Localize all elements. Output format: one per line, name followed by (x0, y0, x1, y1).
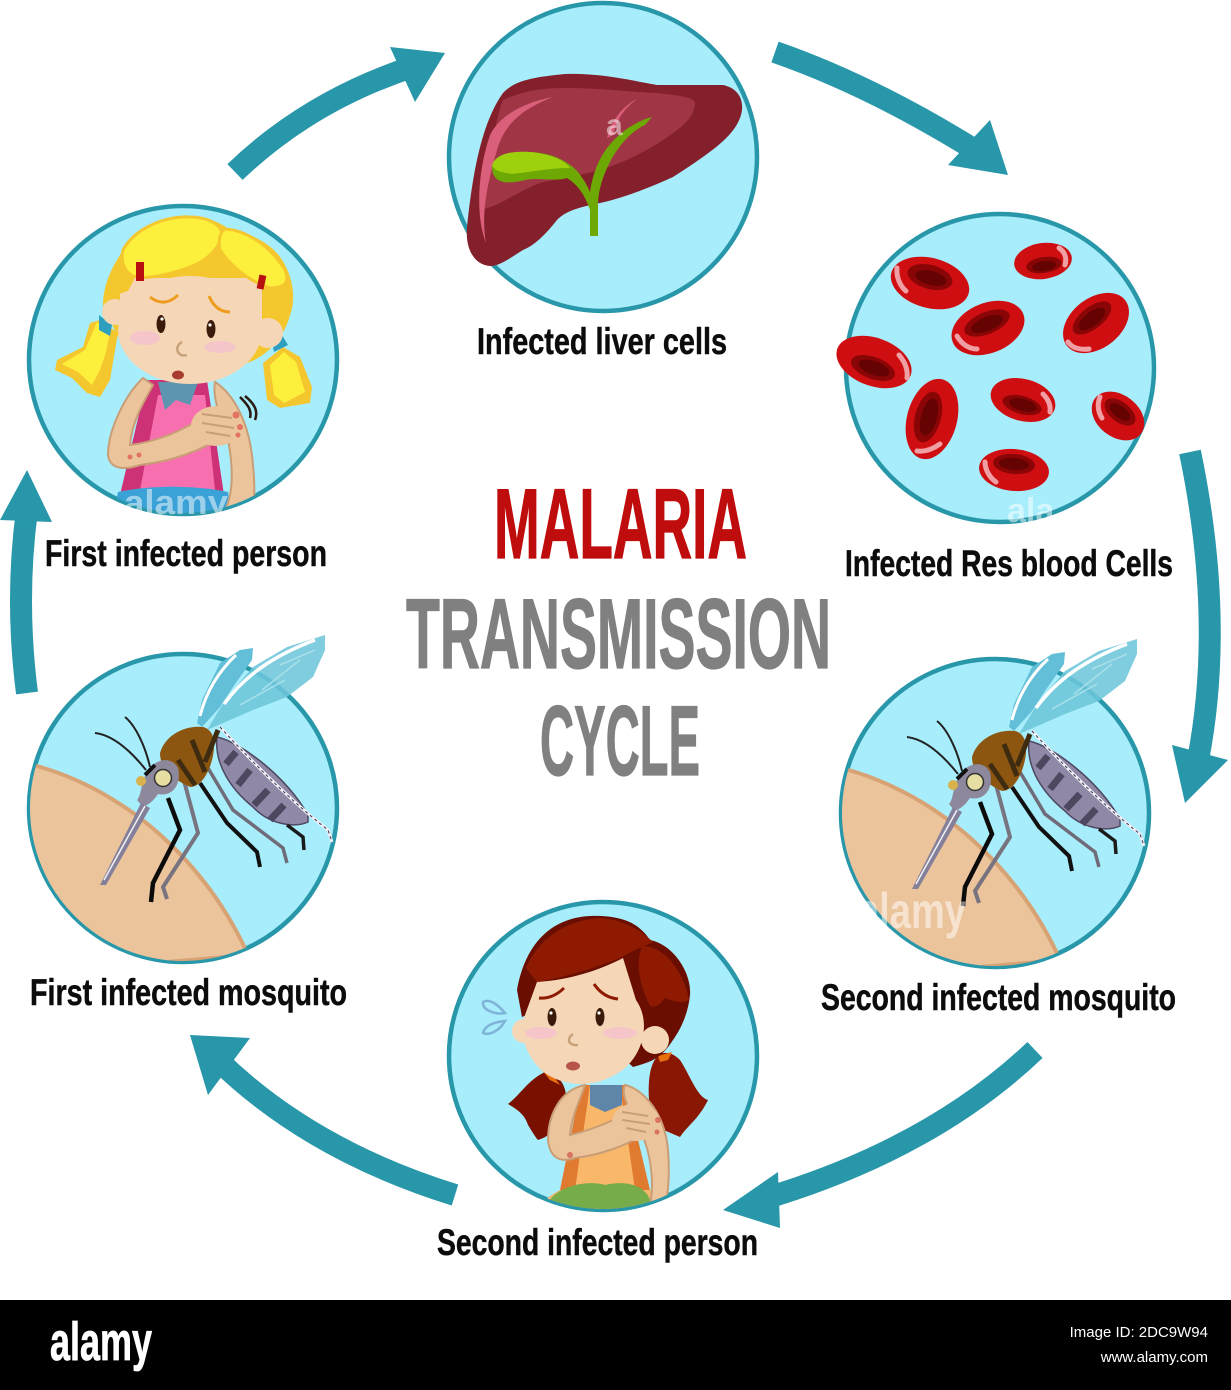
label: first infected mosquito: First infected mosquito (30, 972, 347, 1013)
face (118, 276, 262, 384)
pigtails (55, 315, 312, 408)
fringe (122, 217, 222, 277)
body (120, 380, 224, 495)
arrow: first mosquito to first person (0, 470, 52, 693)
pigtails (508, 1052, 708, 1140)
title (406, 468, 831, 796)
icon: girl with red hair (508, 916, 708, 1215)
panel: infected liver cells (449, 3, 757, 311)
hand (191, 406, 234, 446)
hand (612, 1103, 660, 1141)
title: MALARIA (494, 468, 747, 579)
footer bar: www.alamy.com (1100, 1349, 1208, 1366)
side hair (103, 248, 135, 305)
arms (547, 1084, 634, 1161)
panel: second infected person (449, 902, 757, 1215)
panel: infected red blood cells (829, 214, 1154, 530)
label: first infected person: First infected person (45, 533, 327, 574)
arrow: red blood cells to second mosquito (1172, 452, 1228, 803)
footer bar: Image ID: 2DC9W94 (1070, 1324, 1208, 1341)
watermark: alamy (858, 883, 966, 939)
footer bar (0, 1300, 1231, 1390)
skin (842, 768, 1058, 966)
footer bar: alamy (50, 1312, 152, 1372)
icon: girl with blonde hair (55, 217, 312, 520)
arrow: person to liver (235, 47, 445, 172)
skin (30, 764, 246, 961)
watermark: alamy (124, 484, 228, 522)
panel: second infected mosquito (830, 639, 1149, 980)
icon: red blood cells (829, 239, 1154, 494)
watermark: a (606, 109, 623, 142)
arms (107, 376, 210, 469)
arrow: second mosquito to second person (723, 1050, 1035, 1228)
face (522, 958, 644, 1084)
hair (103, 217, 293, 363)
label: second infected person: Second infected person (437, 1222, 758, 1263)
icon: second mosquito (907, 639, 1144, 906)
icon: sweat drops (483, 1001, 505, 1034)
arrow: second person to first mosquito (190, 1035, 455, 1195)
panel: first infected person (29, 206, 337, 522)
arrow: liver to red blood cells (775, 52, 1008, 175)
hair back (517, 916, 690, 1067)
icon: liver (467, 74, 742, 266)
watermark: ala (1007, 492, 1055, 530)
panel: first infected mosquito (18, 635, 337, 975)
body (547, 1190, 667, 1209)
title: TRANSMISSION (406, 578, 831, 689)
label: infected liver cells: Infected liver cells (477, 321, 727, 362)
icon: first mosquito (95, 635, 332, 902)
title: CYCLE (540, 685, 700, 796)
